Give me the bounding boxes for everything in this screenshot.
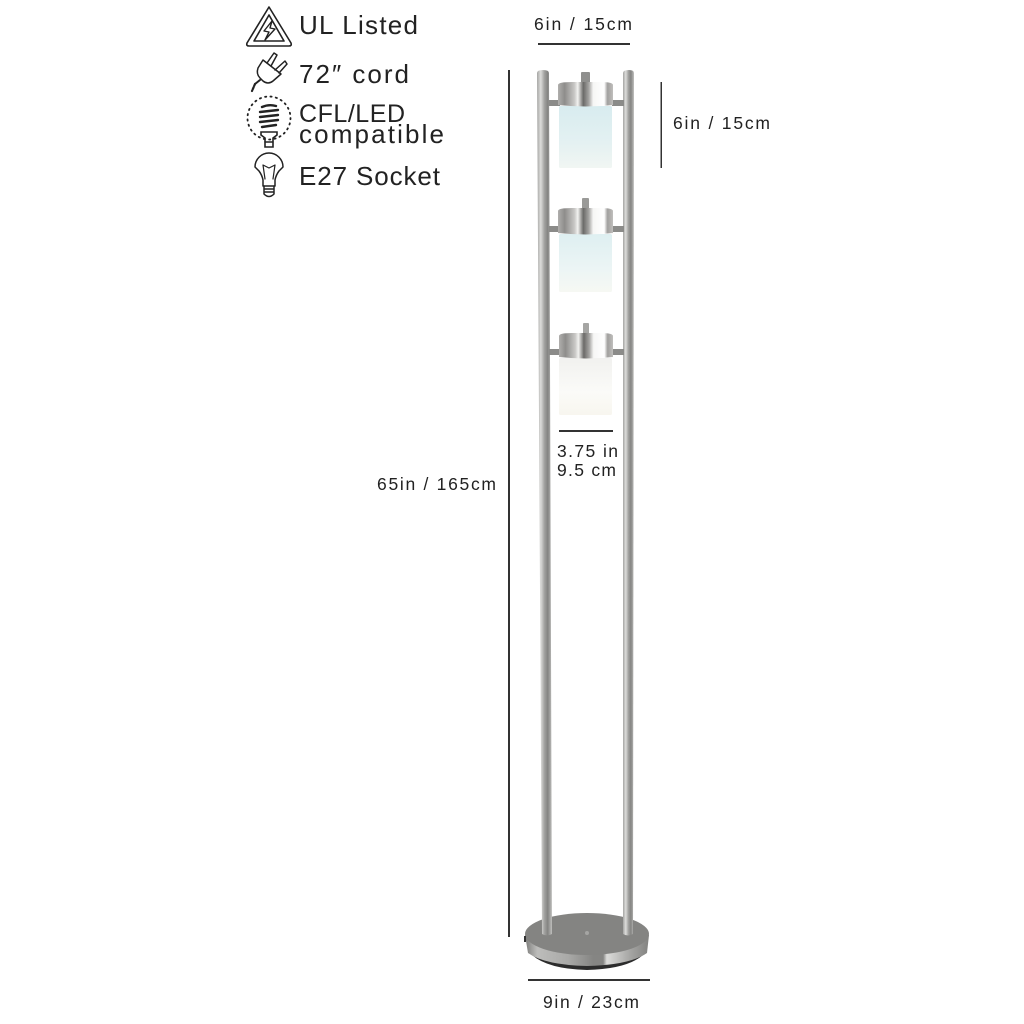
shade 1 <box>558 72 613 168</box>
connector arms <box>548 100 624 355</box>
icon: UL listed warning triangle <box>247 7 291 46</box>
dimension: shade diameter <box>557 430 618 480</box>
icon: E27 light bulb <box>255 153 283 196</box>
shade 3 <box>559 323 613 415</box>
dimension: base width <box>528 979 650 1012</box>
text: CFL/LED: CFL/LED <box>299 100 405 128</box>
text: E27 Socket: E27 Socket <box>299 161 441 191</box>
lamp base <box>524 913 649 970</box>
right rod <box>623 70 634 936</box>
icon: power plug <box>252 53 287 91</box>
panel: feature list <box>247 7 444 196</box>
text: UL Listed: UL Listed <box>299 10 418 40</box>
dimension: shade diameter: 9.5 cm <box>557 460 616 480</box>
text: compatible: compatible <box>299 119 444 149</box>
icon: CFL spiral bulb <box>248 96 290 147</box>
dimension: shade spacing width: 6in / 15cm <box>534 14 632 34</box>
left rod <box>537 70 552 936</box>
dimension: shade diameter: 3.75 in <box>557 441 618 461</box>
floor lamp <box>524 70 649 970</box>
dimension: base width: 9in / 23cm <box>543 992 639 1012</box>
shade 2 <box>558 198 613 292</box>
dimension: shade spacing width <box>534 14 632 45</box>
dimension: shade height <box>660 82 770 168</box>
dimension: total height: 65in / 165cm <box>377 474 496 494</box>
dimension: shade height: 6in / 15cm <box>673 113 770 133</box>
text: 72 inch cord: 72″ cord <box>299 59 409 89</box>
